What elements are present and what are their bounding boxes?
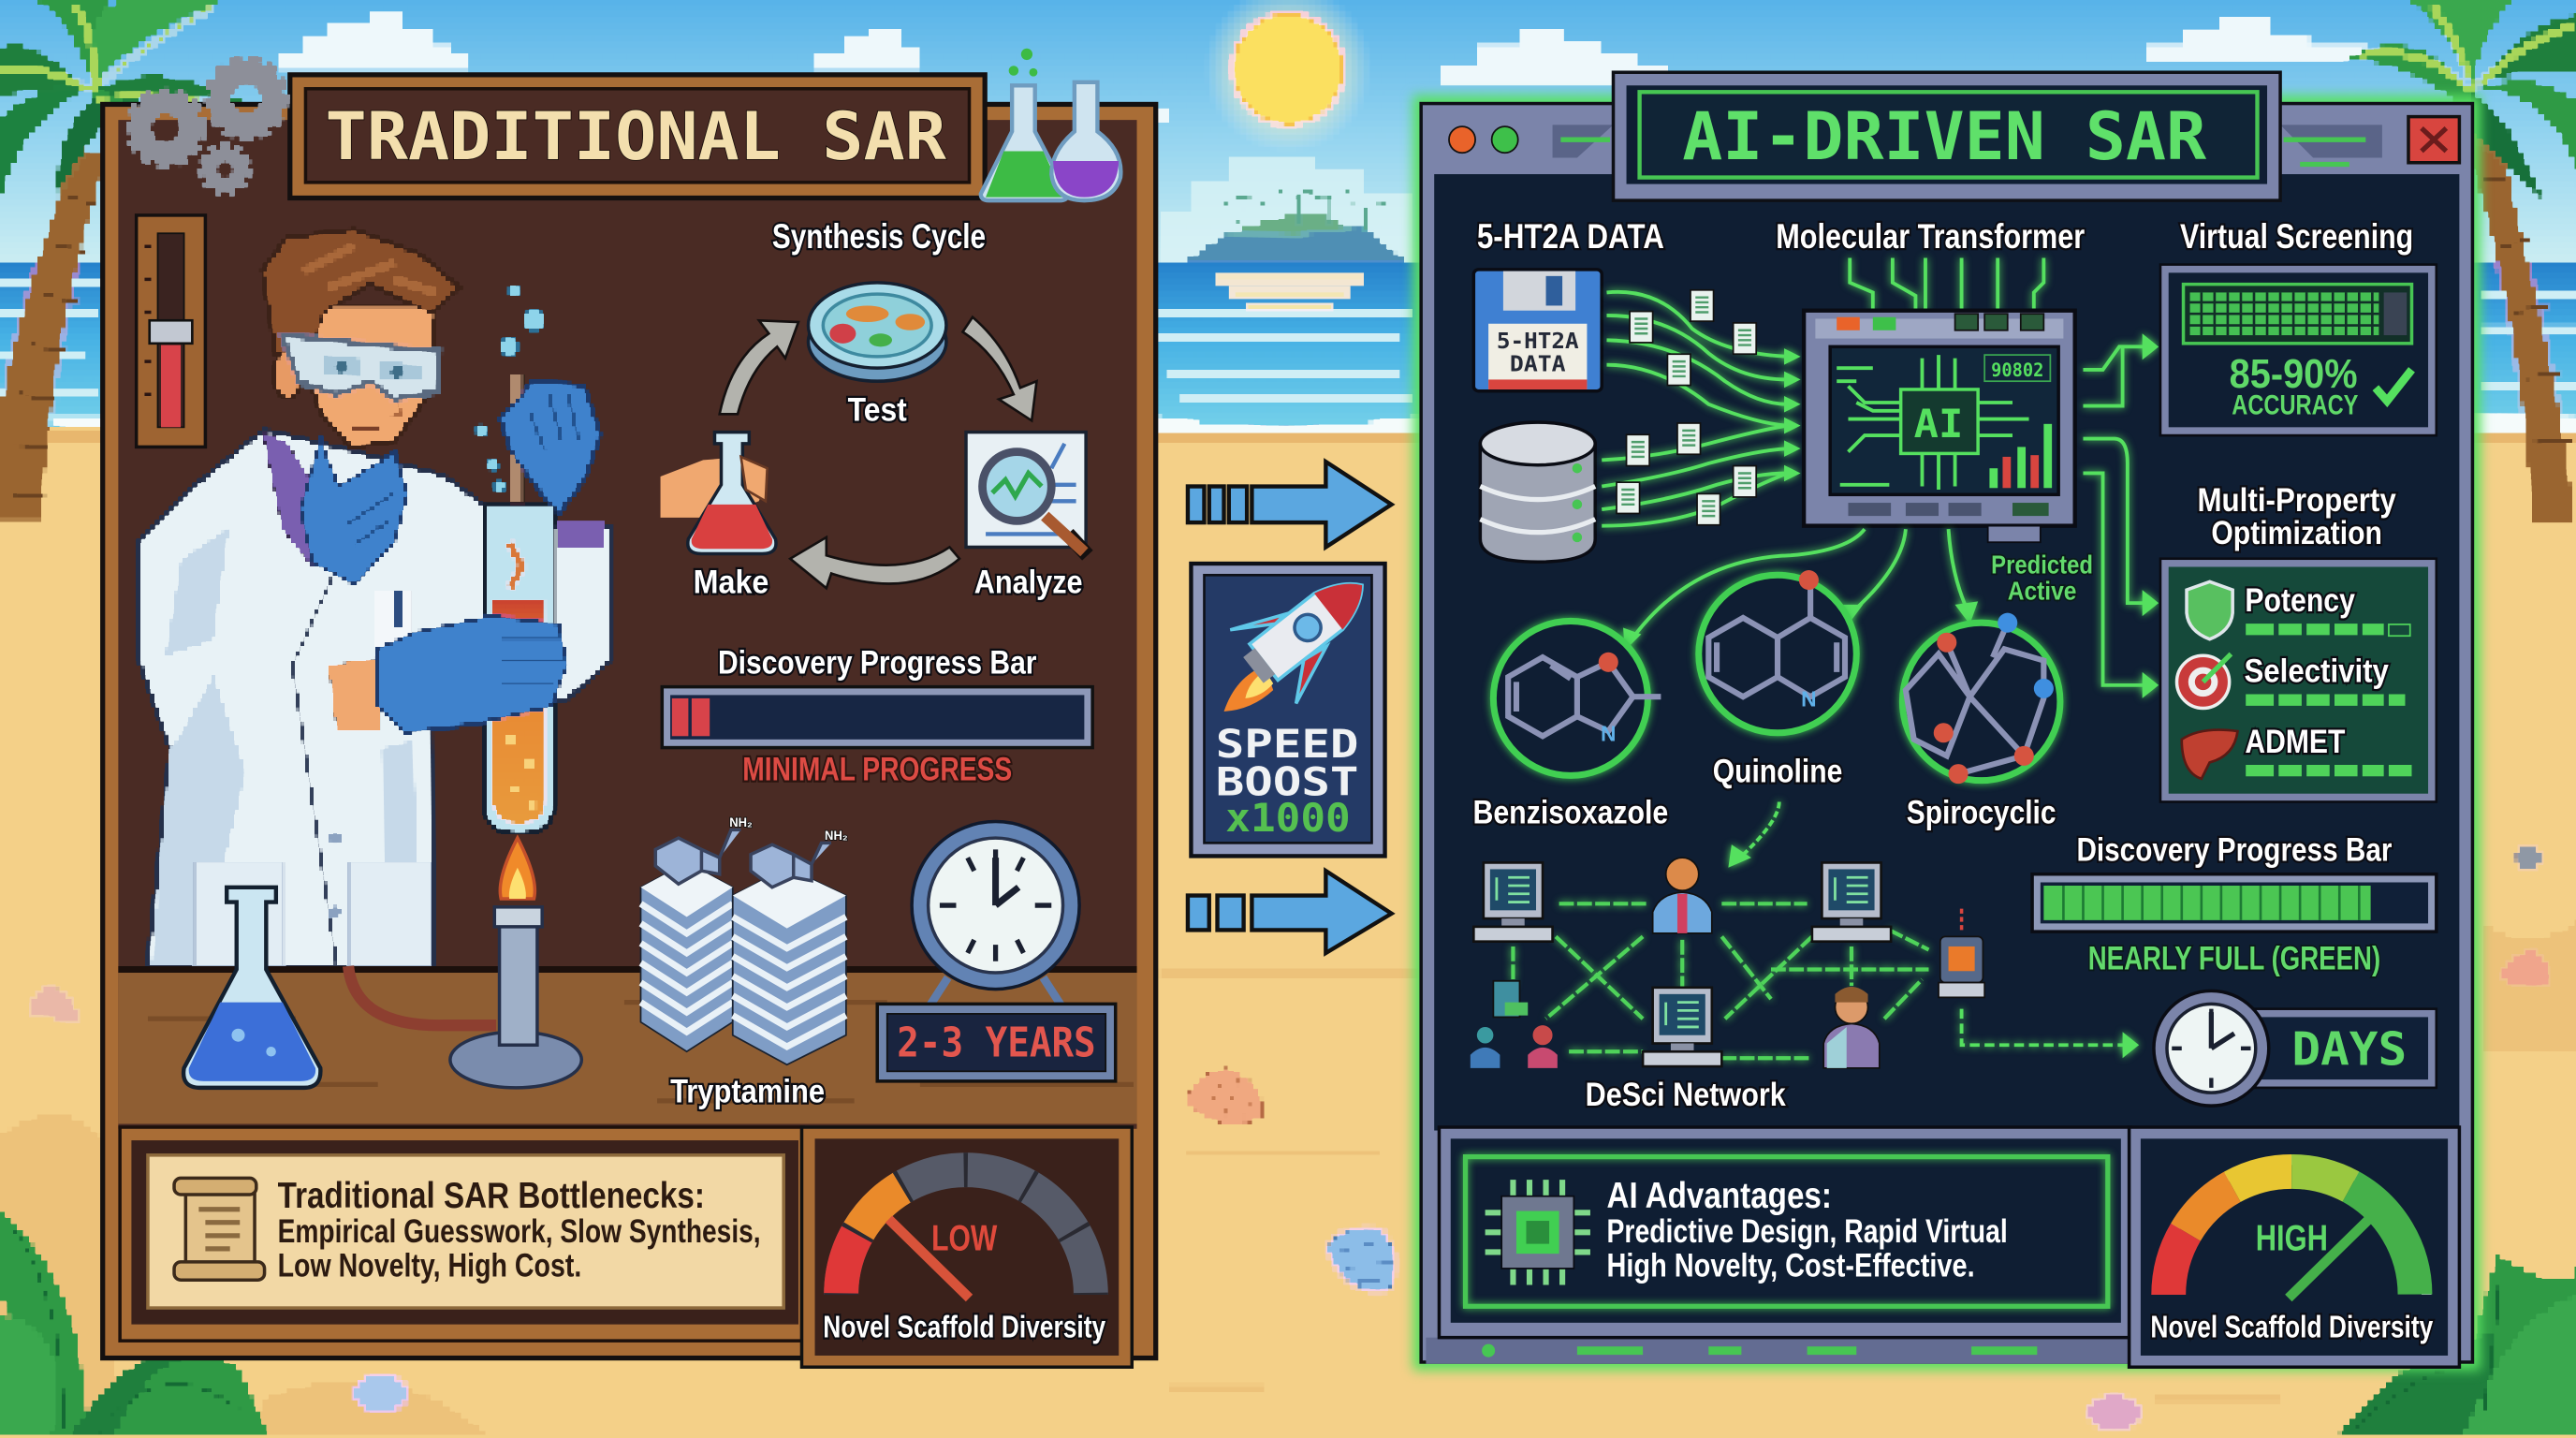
heading: multi-property optimization: Multi-Property [2197,482,2396,519]
palm tree: bottom left [0,1206,272,1438]
label: predicted active: Predicted [1991,550,2093,580]
upper glove [501,381,600,513]
blue flask [183,888,320,1088]
icon: analysis chart with magnifier [966,433,1088,555]
panel: traditional SAR [100,49,1158,1367]
arrow: analyze to make [790,537,959,588]
bottlenecks panel: Empirical Guesswork, Slow Synthesis, [278,1213,761,1250]
slider gauge [135,213,207,448]
icon: hand holding red flask [661,433,776,553]
rubber hose [348,966,496,1025]
time badge: 2-3 years [877,1004,1116,1081]
bunsen burner [450,838,581,1088]
label: make: Make [694,565,768,601]
lab coat [139,431,609,966]
panel: AI-driven SAR [1412,72,2481,1371]
pipette [511,374,522,503]
icon: floppy disk: DATA [1510,353,1566,377]
molecular transformer chip: AI [1914,401,1963,447]
title plaque: TRADITIONAL SAR [326,98,947,175]
arrow: test to analyze [962,317,1036,420]
gauge: novelty low [801,1127,1132,1367]
icon: gears [130,61,285,192]
dashed arrow to days [1962,1009,2139,1058]
tryptamine paper stacks [640,814,848,1064]
island [1179,187,1410,263]
label: DeSci network: DeSci Network [1586,1077,1786,1113]
network computers [1473,862,1891,1066]
icon: floppy disk [1473,270,1602,391]
discovery progress: nearly full: NEARLY FULL (GREEN) [2088,941,2380,977]
arrow: top transition [1188,462,1392,547]
arrow: bottom transition [1188,871,1392,953]
virtual screening box [2160,265,2437,435]
AI advantages panel: Predictive Design, Rapid Virtual [1606,1213,2008,1250]
bottlenecks panel [120,1127,803,1341]
synthesis cycle [661,217,1088,601]
virtual screening box: ACCURACY [2232,389,2359,420]
molecule: benzisoxazole [1493,621,1661,775]
discovery progress: nearly full: Discovery Progress Bar [2076,832,2393,869]
heading: multi-property optimization [2197,482,2396,551]
data documents [1617,290,1756,525]
label: quinoline: Quinoline [1713,753,1842,789]
multi-property box: Selectivity [2244,653,2389,689]
goggles [283,335,439,399]
days badge: DAYS [2291,1021,2407,1076]
days badge [2250,1009,2437,1088]
sun [1206,0,1370,151]
molecule: benzisoxazole: N [1601,722,1616,746]
window buttons [1449,126,1518,153]
title plaque [287,72,988,200]
gloved hand at chin [300,440,407,585]
heading: multi-property optimization: Optimization [2211,515,2382,551]
arrow: make to test [720,320,798,414]
network person: researcher [1823,987,1880,1068]
lower glove holding tube [329,657,381,731]
icon: database [1480,422,1595,562]
molecular transformer chip: 90802 [1991,360,2043,381]
palm tree: top left [0,0,271,521]
label: test: Test [848,391,907,428]
shells and pebbles [30,844,2551,1431]
virtual screening box: 85-90% [2230,351,2358,397]
icon: microchip [1486,1180,1590,1284]
molecular transformer chip [1804,311,2075,542]
tryptamine paper stacks: NH₂ [825,828,848,843]
close button [2408,117,2459,163]
network links [1513,903,1928,1058]
heading: Synthesis Cycle [772,217,986,256]
bottlenecks panel: Traditional SAR Bottlenecks: [278,1176,705,1216]
palm tree: top right [2343,0,2576,526]
discovery progress: minimal: Discovery Progress Bar [718,645,1037,682]
illustration: scientist [139,230,609,966]
discovery progress: minimal [662,645,1092,788]
icon: rocket [1224,549,1395,712]
clock: days [2154,990,2269,1106]
icon: lab flasks [981,49,1120,200]
tryptamine paper stacks: NH₂ [729,814,753,829]
gauge: novelty high: Novel Scaffold Diversity [2150,1311,2434,1345]
title plaque: AI-DRIVEN SAR [1682,98,2207,175]
transformer input lines [1850,258,2043,311]
gauge: novelty high [2130,1127,2459,1367]
face [307,305,435,447]
icon: liver [2182,730,2237,779]
AI advantages panel [1439,1127,2130,1338]
label: tryptamine: Tryptamine [670,1074,825,1110]
output wires [2083,333,2159,698]
multi-property box: ADMET [2245,724,2346,760]
icon: petri dish [809,283,946,381]
heading: molecular transformer: Molecular Transformer [1776,217,2085,256]
gauge: novelty low: Novel Scaffold Diversity [823,1311,1106,1345]
hair [263,230,459,353]
AI advantages panel: High Novelty, Cost-Effective. [1606,1248,1975,1284]
icon: target [2177,654,2231,708]
icon: floppy disk: 5-HT2A [1497,330,1579,354]
molecule: spirocyclic [1902,613,2060,784]
speed boost card: BOOST [1216,758,1358,804]
heading: 5-HT2A data: 5-HT2A DATA [1477,217,1664,256]
AI advantages panel: AI Advantages: [1606,1176,1832,1216]
test tube [485,506,553,833]
multi-property box: Potency [2245,582,2355,619]
molecule: quinoline [1699,570,1856,733]
speed boost card: SPEED [1216,721,1358,767]
speed boost card: x1000 [1225,795,1351,841]
speed boost card [1191,549,1395,856]
network person: scientist in tie [1653,858,1712,933]
label: benzisoxazole: Benzisoxazole [1472,794,1668,830]
data wires [1602,292,1801,526]
time badge: 2-3 years: 2-3 YEARS [897,1020,1096,1067]
arrows: transformer to molecules [1623,529,1978,651]
desk [118,966,1137,1123]
label: predicted active: Active [2008,577,2076,606]
heading: virtual screening: Virtual Screening [2180,217,2413,256]
network server robot [1939,909,1984,997]
label: predicted active [1991,550,2093,606]
bottlenecks panel: Low Novelty, High Cost. [278,1248,581,1284]
icon: scroll [174,1178,265,1280]
network nodes: small group [1471,981,1558,1068]
icon: shield [2187,581,2232,639]
palm tree: bottom right [2334,1252,2576,1438]
label: analyze: Analyze [974,565,1083,601]
discovery progress: minimal: MINIMAL PROGRESS [742,752,1012,788]
multi-property box [2160,559,2437,801]
label: spirocyclic: Spirocyclic [1907,794,2056,830]
gauge: novelty low: LOW [931,1219,998,1259]
bubbles [476,286,544,492]
arrow: quinoline to network [1728,801,1779,868]
gauge: novelty high: HIGH [2256,1219,2328,1259]
molecule: quinoline: N [1801,687,1817,712]
alarm clock [912,822,1079,1005]
title plaque [1614,72,2280,200]
clouds [279,15,2365,124]
discovery progress: nearly full [2032,832,2437,977]
